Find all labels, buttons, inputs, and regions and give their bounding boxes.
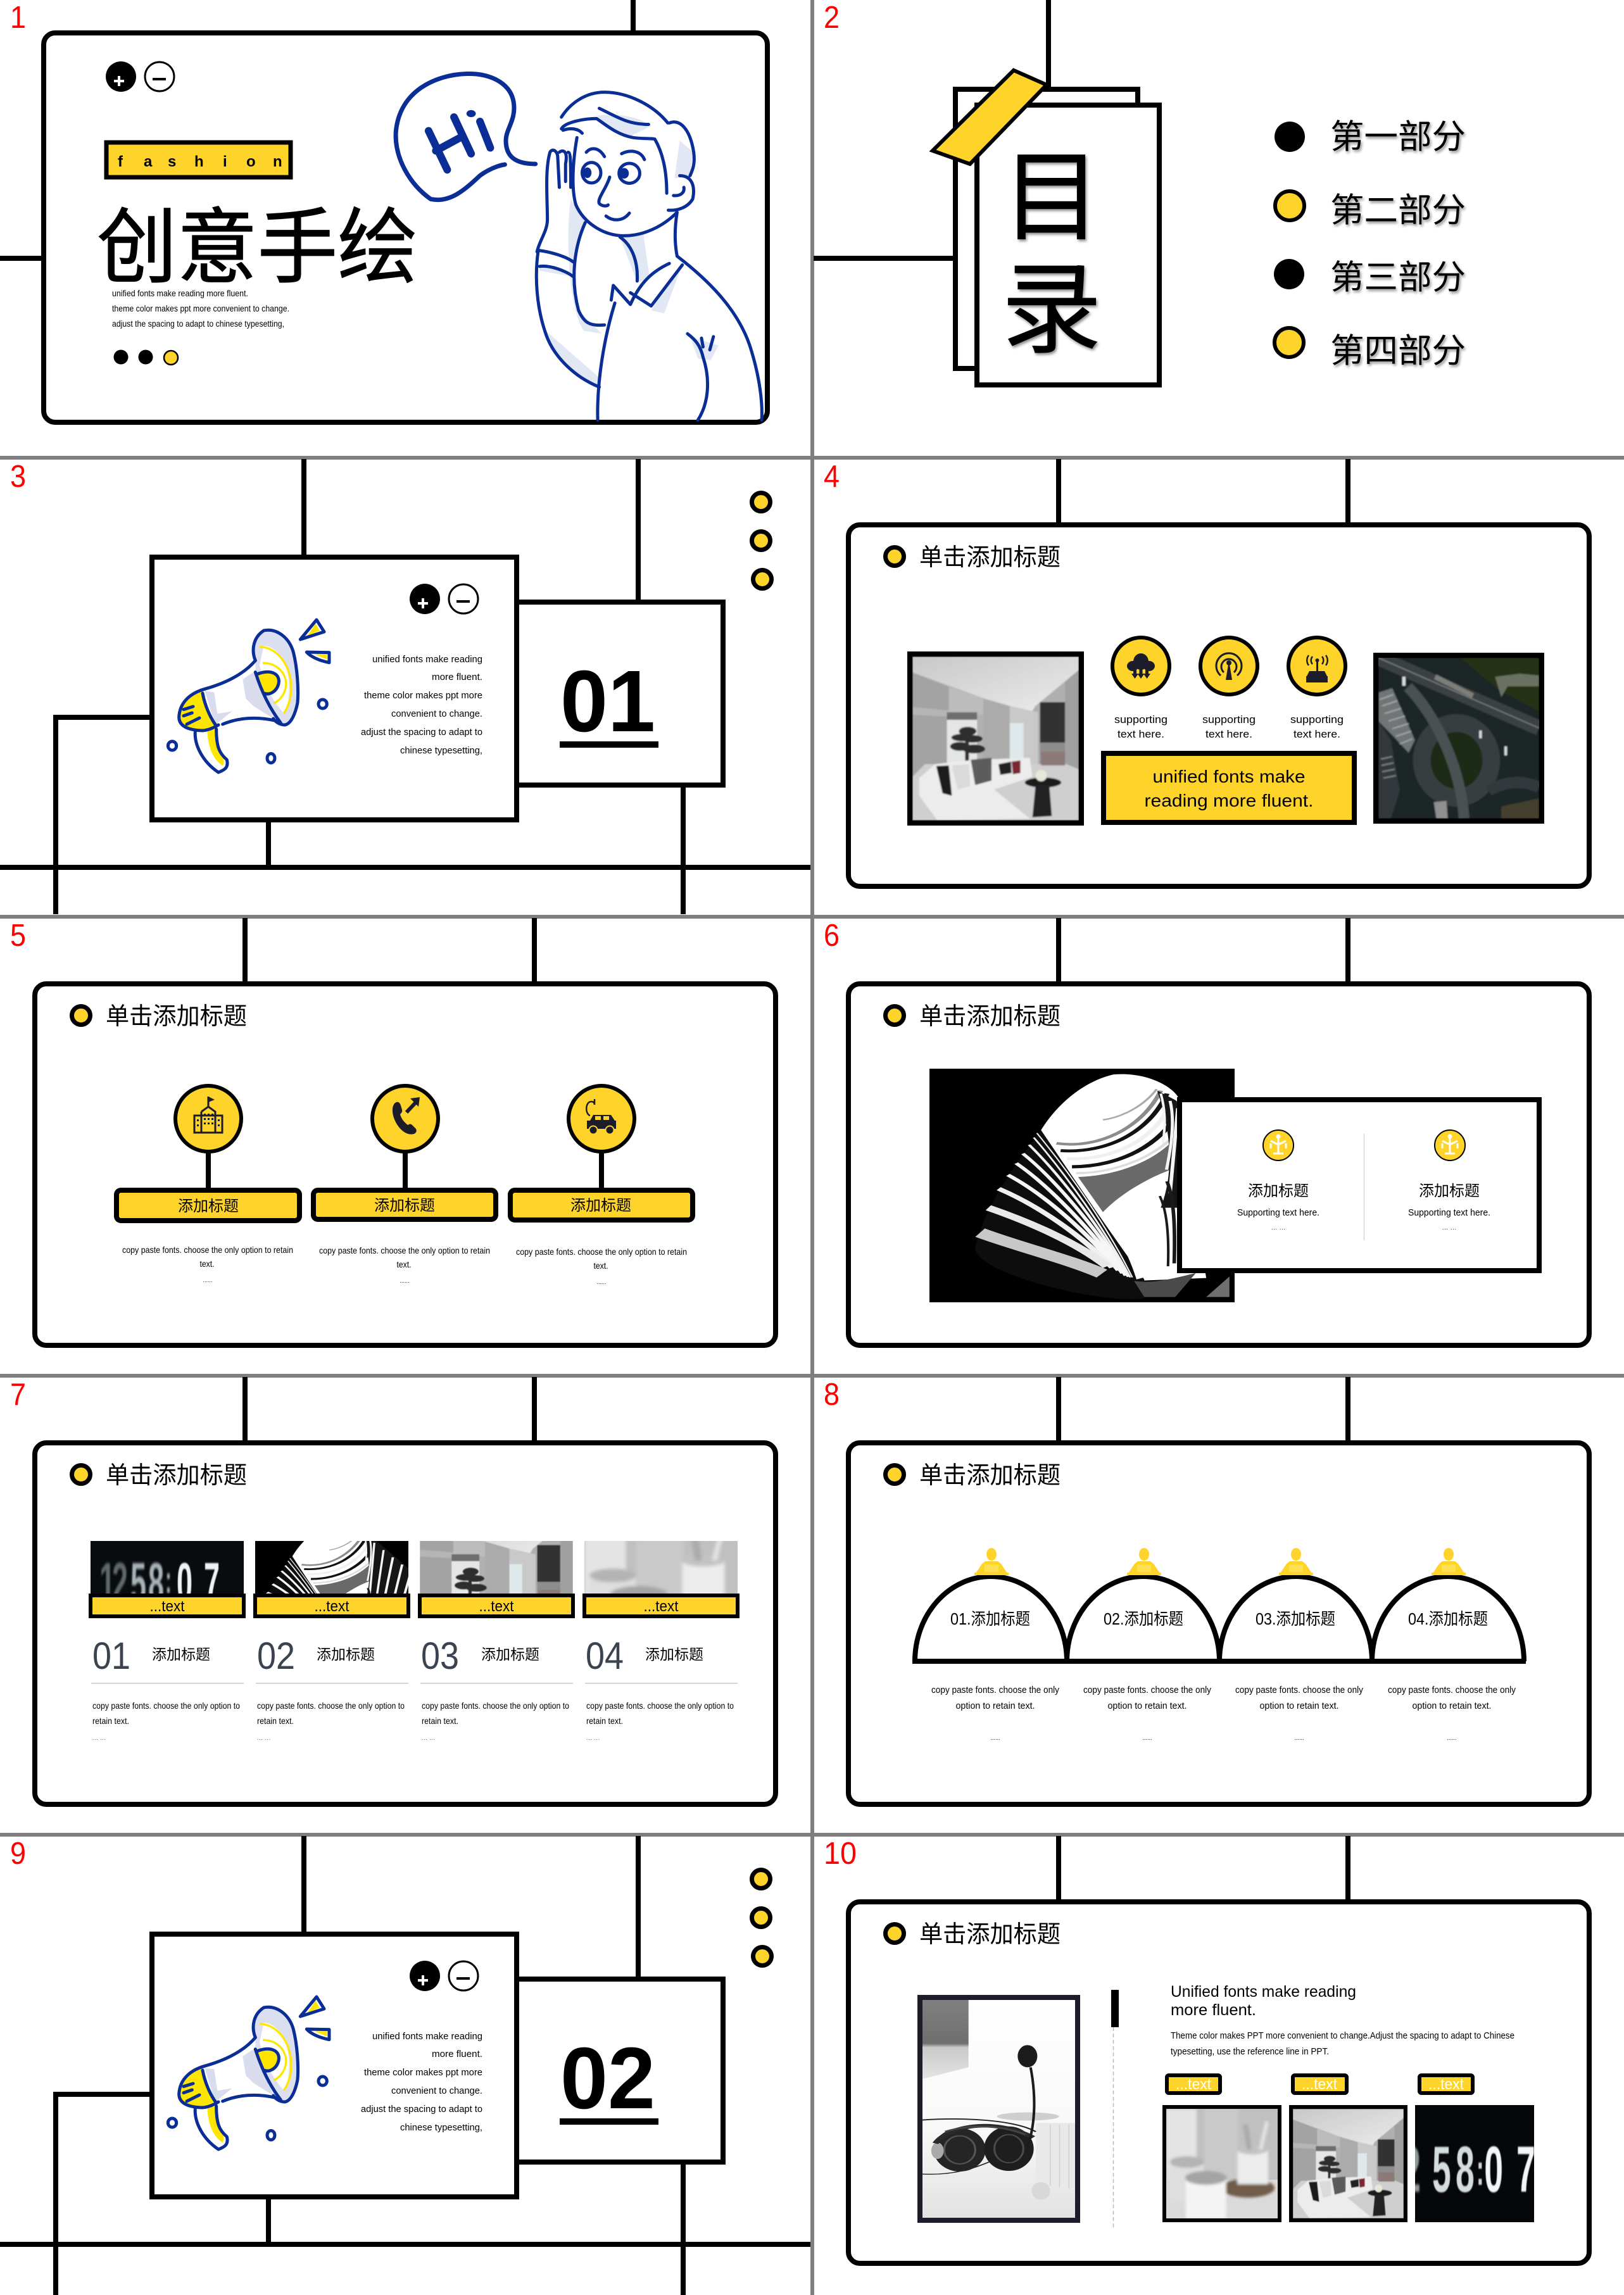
tags: ...text [1302, 2076, 1337, 2093]
tags: ...text [314, 1598, 349, 1615]
accent bar [1111, 1990, 1119, 2027]
heading 目录: 目 [1002, 143, 1101, 253]
icon: megaphone [168, 620, 329, 772]
panel: slide 10 [824, 1836, 1589, 2263]
photo: clock: 07 [1484, 2134, 1535, 2206]
slide number 3: 3 [10, 460, 26, 494]
panel: slide 7 [10, 1377, 776, 1804]
slide number 8: 8 [824, 1378, 840, 1412]
panel: slide 9 section 02 [0, 1836, 810, 2295]
arch descriptions: ...... [1142, 1735, 1152, 1741]
item 1: ... ... [1271, 1224, 1285, 1231]
back paper [955, 89, 1138, 368]
connector lines [1059, 1836, 1348, 1901]
connector lines [1059, 1377, 1348, 1442]
column 03: 03 [421, 1635, 459, 1677]
arch labels: 03.添加标题 [1256, 1609, 1335, 1628]
heading text [1171, 1983, 1356, 2019]
arch descriptions: copy paste fonts. choose the only [1083, 1685, 1211, 1695]
column 1: ...... [203, 1277, 213, 1283]
column 02: ... ... [257, 1735, 270, 1741]
photo: clock: 58 [130, 1552, 164, 1615]
arch labels [950, 1609, 1488, 1628]
photo: clock: 2 [1402, 2134, 1421, 2206]
tags [1167, 2075, 1473, 2093]
column 01: copy paste fonts. choose the only option to [92, 1701, 240, 1711]
arch labels: 02.添加标题 [1104, 1609, 1183, 1628]
column 01: ... ... [92, 1735, 106, 1741]
heading text: more fluent. [1171, 2001, 1256, 2019]
illustration: man with speech bubble [396, 73, 762, 420]
yellow tape [933, 70, 1047, 164]
yellow dots [752, 493, 771, 589]
column 2: copy paste fonts. choose the only option to retain [319, 1245, 490, 1255]
photo: interior [907, 651, 1084, 826]
column 3: 添加标题 [570, 1197, 631, 1214]
contents list: 第二部分 [1330, 192, 1466, 229]
body text: chinese typesetting, [400, 745, 482, 756]
column 01 [91, 1635, 244, 1741]
fashion tag [106, 142, 291, 177]
header: 单击添加标题 [919, 544, 1061, 571]
yellow callout: reading more fluent. [1145, 791, 1313, 810]
tags: ...text [643, 1598, 679, 1615]
panel: slide 3 section 01 [0, 459, 810, 914]
subtitle text: adjust the spacing to adapt to chinese typesetting, [112, 318, 284, 329]
supporting text: text here. [1294, 728, 1340, 740]
arch descriptions [931, 1685, 1516, 1741]
yellow callout [1104, 753, 1354, 822]
supporting text: supporting [1202, 714, 1256, 726]
photo: striped building [929, 1069, 1235, 1302]
paragraph: Theme color makes PPT more convenient to change.Adjust the spacing to adapt to Chinese [1171, 2030, 1514, 2041]
arch descriptions: copy paste fonts. choose the only [931, 1685, 1059, 1695]
header: 单击添加标题 [106, 1003, 247, 1030]
number box [517, 602, 723, 785]
arches [912, 1576, 1526, 1661]
heading 目录 [1002, 143, 1102, 366]
column 04: copy paste fonts. choose the only option to [586, 1701, 734, 1711]
arch descriptions: option to retain text. [956, 1701, 1035, 1711]
subtitle text: unified fonts make reading more fluent. [112, 288, 248, 298]
panel: slide 2 contents [814, 0, 1466, 385]
column 3 [510, 1086, 693, 1285]
connector lines [0, 1836, 810, 2295]
panel: slide 5 [10, 918, 776, 1345]
body text: adjust the spacing to adapt to [361, 2104, 482, 2115]
arch descriptions: option to retain text. [1260, 1701, 1338, 1711]
card [35, 1443, 776, 1804]
arch descriptions: copy paste fonts. choose the only [1235, 1685, 1363, 1695]
slide number 9: 9 [10, 1837, 26, 1871]
front paper [977, 105, 1159, 385]
three dots [114, 349, 178, 365]
contents list: 第一部分 [1330, 118, 1466, 156]
column 1 [116, 1086, 299, 1283]
header: 单击添加标题 [106, 1462, 247, 1489]
column 02 [256, 1635, 408, 1741]
heading text: Unified fonts make reading [1171, 1983, 1356, 2001]
column 01: retain text. [92, 1716, 129, 1726]
photo: clock [1402, 2105, 1535, 2222]
header: 单击添加标题 [919, 1921, 1061, 1948]
tags: ...text [479, 1598, 514, 1615]
item 1 [1237, 1130, 1319, 1231]
section number 01: 01 [560, 653, 655, 750]
column 01: 01 [92, 1635, 130, 1677]
icon: plus and minus [410, 1961, 478, 1991]
icon: megaphone [168, 1997, 329, 2149]
arch descriptions: copy paste fonts. choose the only [1388, 1685, 1516, 1695]
card [35, 984, 776, 1345]
subtitle text [112, 288, 289, 329]
column 04: retain text. [586, 1716, 623, 1726]
title: 创意手绘 [97, 201, 418, 294]
column 04: 添加标题 [645, 1646, 703, 1663]
photo: cups [584, 1541, 738, 1594]
column 1: 添加标题 [178, 1198, 239, 1215]
arch labels: 01.添加标题 [950, 1609, 1030, 1628]
card [848, 525, 1589, 886]
header: 单击添加标题 [919, 1462, 1061, 1489]
item 2: Supporting text here. [1408, 1207, 1490, 1218]
slide number 7: 7 [10, 1378, 26, 1412]
tags [91, 1595, 738, 1616]
connector lines [245, 918, 534, 983]
arch descriptions: ...... [1294, 1735, 1304, 1741]
body text: unified fonts make reading [372, 2031, 482, 2042]
column 2: text. [396, 1259, 412, 1269]
body text: more fluent. [432, 672, 482, 682]
contents list: 第三部分 [1330, 259, 1466, 296]
photo: clock: : [1476, 2145, 1484, 2194]
supporting text: text here. [1117, 728, 1164, 740]
tags: ...text [1428, 2076, 1464, 2093]
arch descriptions: option to retain text. [1412, 1701, 1492, 1711]
number box [517, 1979, 723, 2162]
panel: slide 6 [824, 918, 1589, 1345]
dashed guide [1113, 2027, 1114, 2229]
photo: clock: 58 [1432, 2134, 1475, 2206]
photo: clock [91, 1541, 244, 1615]
slide number 1: 1 [10, 1, 26, 35]
body text: convenient to change. [391, 708, 482, 719]
connector lines [1059, 459, 1348, 524]
info box [1180, 1100, 1539, 1271]
connector lines [245, 1377, 534, 1442]
column 03: ... ... [422, 1735, 435, 1741]
paragraph [1171, 2030, 1514, 2057]
main box [152, 557, 517, 820]
fashion tag: fashion [118, 153, 282, 170]
contents list [1274, 118, 1466, 370]
column 2: ...... [400, 1278, 410, 1284]
body text: more fluent. [432, 2049, 482, 2059]
cover card [44, 33, 767, 422]
photo: stripes [255, 1541, 408, 1594]
connector lines [0, 0, 633, 258]
card [848, 1443, 1589, 1804]
column 03: retain text. [422, 1716, 458, 1726]
slide number 4: 4 [824, 460, 840, 494]
feature icons [1112, 638, 1345, 695]
supporting text: text here. [1205, 728, 1252, 740]
body text: unified fonts make reading [372, 654, 482, 665]
column 1: text. [200, 1259, 214, 1269]
column 03 [420, 1635, 573, 1741]
photo: clock: 07 [177, 1552, 220, 1615]
column 04: ... ... [586, 1735, 600, 1741]
card [848, 984, 1589, 1345]
slide number 5: 5 [10, 919, 26, 953]
arch labels: 04.添加标题 [1408, 1609, 1488, 1628]
photo: headset [917, 1995, 1080, 2223]
column 3: text. [594, 1261, 608, 1271]
column 04 [585, 1635, 738, 1741]
photo: clock: : [165, 1559, 172, 1602]
arch descriptions: option to retain text. [1108, 1701, 1187, 1711]
item 1: Supporting text here. [1237, 1207, 1319, 1218]
photo: interior [1289, 2105, 1407, 2222]
subtitle text: theme color makes ppt more convenient to change. [112, 303, 289, 313]
body text [361, 2031, 482, 2133]
supporting text: supporting [1290, 714, 1344, 726]
photo: aerial roads [1373, 653, 1544, 824]
column 02: retain text. [257, 1716, 294, 1726]
column 02: 02 [257, 1635, 295, 1677]
slide number 10: 10 [824, 1837, 857, 1871]
panel: slide 1 cover [0, 0, 767, 422]
column 04: 04 [586, 1635, 624, 1677]
item 1: 添加标题 [1248, 1183, 1309, 1200]
icon: plus and minus [106, 61, 174, 92]
slide number 2: 2 [824, 1, 840, 35]
column 1: copy paste fonts. choose the only option to retain [122, 1245, 293, 1255]
icon: plus and minus [410, 584, 478, 614]
column 2: 添加标题 [374, 1197, 435, 1214]
arch descriptions: ...... [1447, 1735, 1457, 1741]
photo: clock: 12 [99, 1552, 128, 1615]
body text: adjust the spacing to adapt to [361, 727, 482, 738]
column 01: 添加标题 [152, 1646, 210, 1663]
section number 02: 02 [560, 2030, 655, 2127]
supporting text: supporting [1114, 714, 1168, 726]
column 02: 添加标题 [317, 1646, 375, 1663]
supporting text [1114, 714, 1344, 740]
column 02: copy paste fonts. choose the only option to [257, 1701, 405, 1711]
contents list: 第四部分 [1330, 332, 1466, 370]
yellow figures [974, 1548, 1466, 1575]
photo: interior [420, 1541, 573, 1594]
connector lines [814, 0, 1048, 258]
heading 目录: 录 [1002, 255, 1102, 366]
column 3: ...... [596, 1279, 607, 1285]
yellow dots [752, 1870, 771, 1965]
body text [361, 654, 482, 756]
column 03: copy paste fonts. choose the only option to [422, 1701, 569, 1711]
arch descriptions: ...... [990, 1735, 1000, 1741]
panel: slide 8 [824, 1377, 1589, 1804]
item 2 [1408, 1130, 1490, 1231]
photo: cups [1162, 2105, 1281, 2222]
slide number 6: 6 [824, 919, 840, 953]
paragraph: typesetting, use the reference line in PPT. [1171, 2046, 1329, 2057]
body text: theme color makes ppt more [364, 690, 482, 701]
item 2: ... ... [1442, 1224, 1456, 1231]
card [848, 1902, 1589, 2263]
body text: theme color makes ppt more [364, 2067, 482, 2078]
body text: convenient to change. [391, 2085, 482, 2096]
connector lines [1059, 918, 1348, 983]
column 3: copy paste fonts. choose the only option to retain [516, 1247, 687, 1257]
column 2 [313, 1086, 496, 1284]
item 2: 添加标题 [1419, 1183, 1480, 1200]
panel: slide 4 [824, 459, 1589, 886]
tags: ...text [149, 1598, 185, 1615]
main box [152, 1934, 517, 2197]
tags: ...text [1176, 2076, 1211, 2093]
connector lines [0, 459, 810, 914]
yellow callout: unified fonts make [1152, 767, 1306, 786]
header: 单击添加标题 [919, 1003, 1061, 1030]
body text: chinese typesetting, [400, 2122, 482, 2133]
column 03: 添加标题 [481, 1646, 539, 1663]
